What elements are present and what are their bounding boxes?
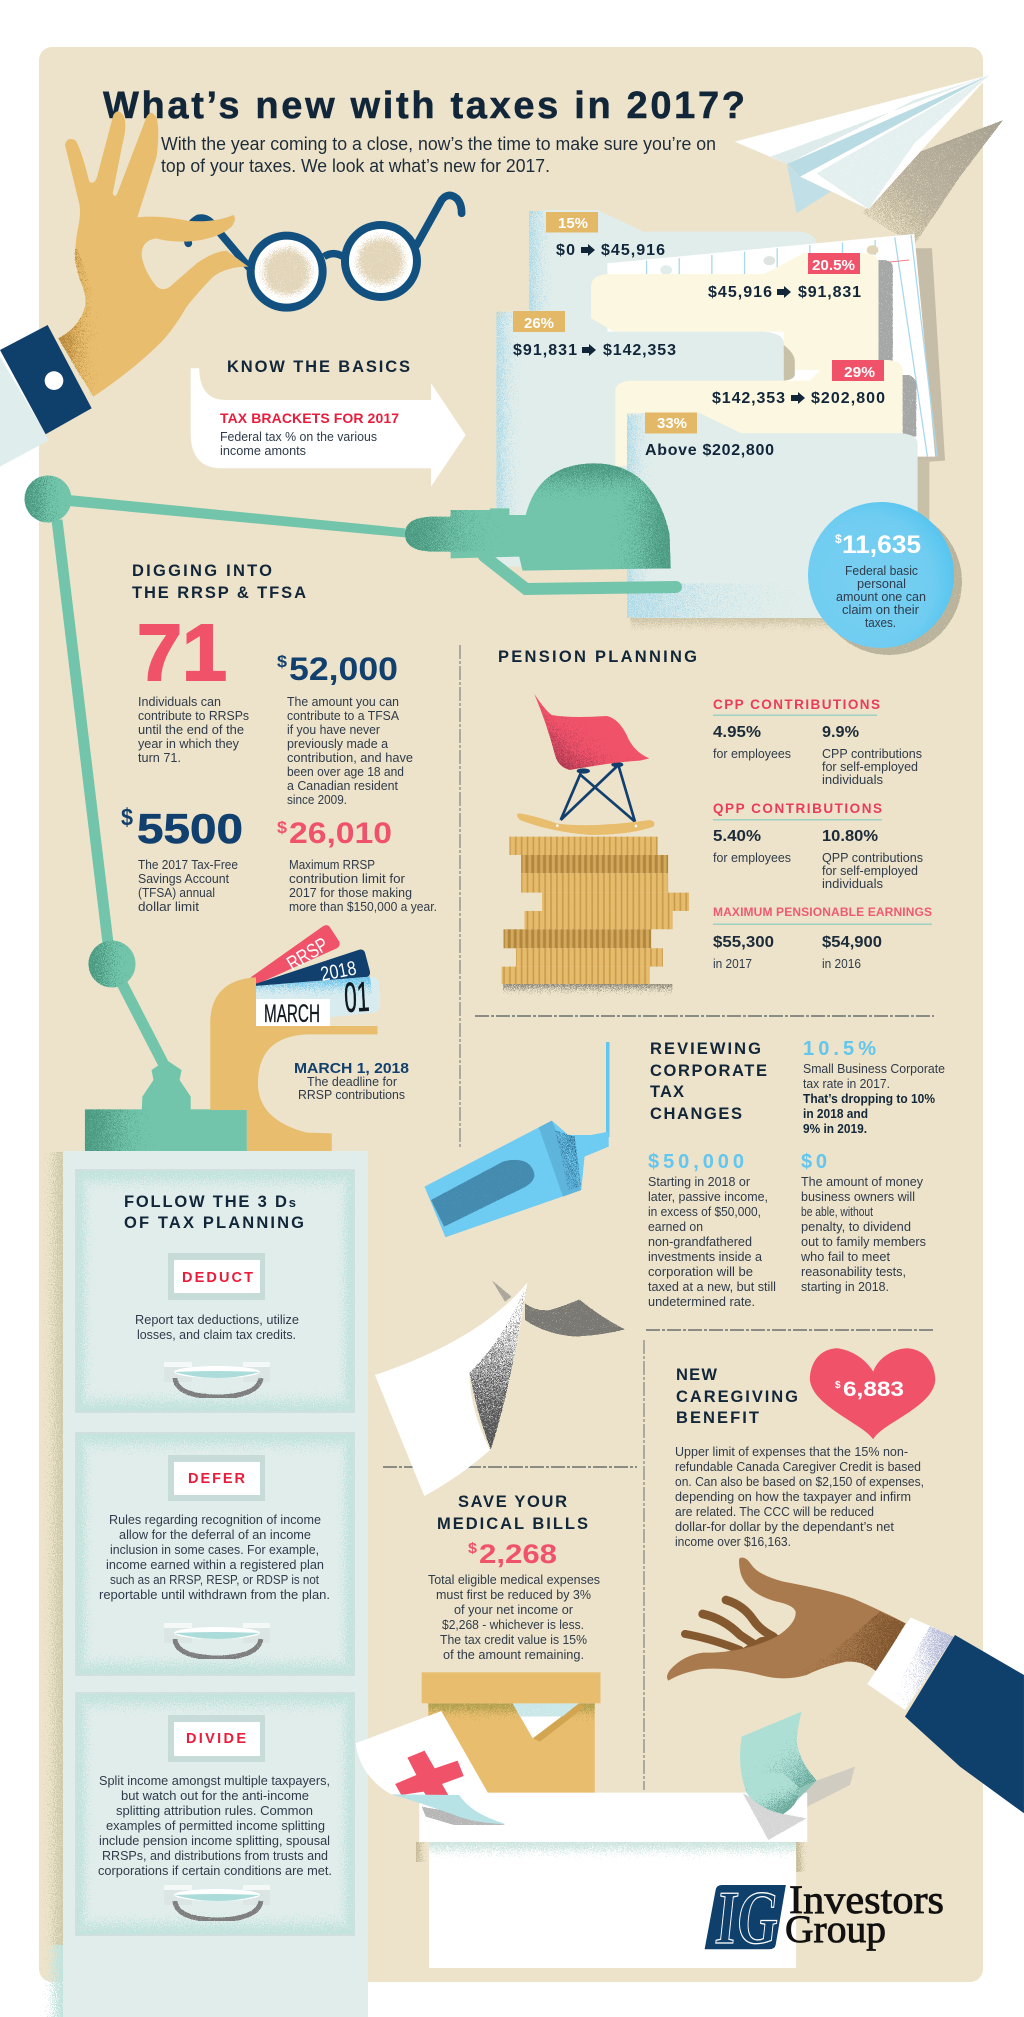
CPP contributions: for employees — [713, 746, 791, 761]
text: divide: but watch out for the anti-income — [121, 1788, 309, 1803]
blue circle: basic personal amount: amount one can — [836, 589, 926, 604]
stat: 10.5%: tax rate in 2017. — [803, 1076, 890, 1091]
stat: $26,010: 26,010 — [289, 817, 392, 850]
text: caregiving benefit: depending on how the taxpayer and infirm — [675, 1489, 911, 1504]
arrow: tax brackets: income amonts — [220, 443, 306, 458]
heading: save your medical bills — [437, 1493, 588, 1533]
palm — [667, 1557, 906, 1681]
stat: $0: who fail to meet — [800, 1249, 890, 1264]
stat: $2,268: 2,268 — [479, 1539, 557, 1569]
intro text — [161, 134, 716, 176]
stat: $5500: 5500 — [137, 805, 243, 852]
QPP contributions: for employees — [713, 850, 791, 865]
intro text: top of your taxes. We look at what’s new for 2017. — [161, 156, 550, 176]
folder tab 26% — [496, 311, 784, 567]
front folder — [627, 413, 918, 618]
intro text: With the year coming to a close, now’s the time to make sure you’re on — [161, 134, 716, 154]
text: caregiving benefit: refundable Canada Caregiver Credit is based — [675, 1459, 921, 1474]
heading: new caregiving benefit: CAREGIVING — [676, 1388, 798, 1406]
stat: 71: turn 71. — [138, 750, 181, 765]
QPP contributions: 5.40% — [713, 828, 761, 845]
stat: $5500: (TFSA) annual — [138, 885, 215, 900]
stat: $5500: Savings Account — [138, 871, 229, 886]
deadline text: The deadline for — [307, 1074, 398, 1089]
maximum pensionable earnings: $54,900 — [822, 934, 882, 951]
QPP contributions: 10.80% — [822, 828, 878, 845]
text: defer — [99, 1512, 330, 1602]
heading: digging into the RRSP & TFSA: THE RRSP & TFSA — [132, 584, 306, 602]
2018 card — [255, 950, 370, 987]
2018 card: 2018 — [319, 957, 358, 986]
text: defer: income earned within a registered plan — [106, 1557, 324, 1572]
cuff — [0, 325, 92, 434]
tax bracket ranges: $142,353 — [603, 342, 676, 359]
lamp head — [405, 463, 671, 571]
stat: $0: out to family members — [801, 1234, 926, 1249]
icon: green paper — [740, 1712, 855, 1840]
QPP contributions — [713, 801, 923, 891]
icon: highlighter — [425, 1042, 610, 1237]
RRSP card: RRSP — [283, 934, 332, 975]
dividers — [383, 645, 934, 1790]
tab 15%: 15% — [558, 216, 588, 232]
text: defer: such as an RRSP, RESP, or RDSP is not — [110, 1572, 319, 1587]
maximum pensionable earnings: in 2016 — [822, 956, 861, 971]
icon: green paper flap on box — [743, 1773, 817, 1840]
icon: rocking chair on coins — [502, 694, 689, 997]
stat: 71 — [137, 608, 249, 765]
navy sleeve — [905, 1635, 1024, 1813]
stat: $26,010: Maximum RRSP — [289, 857, 375, 872]
tax bracket ranges: $45,916 — [601, 242, 665, 259]
icon: desk lamp — [24, 463, 676, 1152]
icon: heart with $6,883 — [810, 1348, 935, 1439]
heading: reviewing corporate tax changes: CORPORATE — [650, 1062, 767, 1080]
stand — [210, 977, 377, 1152]
label: deduct: DEDUCT — [182, 1270, 253, 1286]
stat: $50,000: undetermined rate. — [648, 1294, 755, 1309]
lamp lower arm — [57, 520, 163, 1063]
stat: $52,000: contribute to a TFSA — [287, 708, 399, 723]
stat: $52,000: The amount you can — [287, 694, 399, 709]
stat: 10.5%: in 2018 and — [803, 1106, 868, 1121]
stat: $50,000: non-grandfathered — [648, 1234, 752, 1249]
stat: $2,268: $ — [468, 1540, 478, 1557]
stat: $0: starting in 2018. — [801, 1279, 889, 1294]
logo wordmark: Investors — [789, 1877, 944, 1922]
tab 20.5%: 20.5% — [812, 258, 855, 274]
logo wordmark: Group — [785, 1908, 886, 1951]
stat: $0: reasonability tests, — [801, 1264, 906, 1279]
lined paper — [607, 234, 935, 457]
deadline text — [294, 1061, 409, 1102]
blue circle: basic personal amount: $ — [835, 532, 842, 546]
fingers — [685, 1600, 773, 1650]
cuff button — [45, 371, 63, 390]
text: divide: include pension income splitting, spousal — [99, 1833, 330, 1848]
stat: $50,000: earned on — [648, 1219, 703, 1234]
text: caregiving benefit — [675, 1444, 924, 1549]
text: defer: reportable until withdrawn from the plan. — [99, 1587, 330, 1602]
stat: $50,000: Starting in 2018 or — [648, 1174, 751, 1189]
chair rocker — [517, 813, 654, 835]
stat: 71: Individuals can — [138, 694, 221, 709]
text: divide: RRSPs, and distributions from trusts and — [102, 1848, 328, 1863]
text: divide: corporations if certain conditions are met. — [98, 1863, 332, 1878]
drawer: divide — [76, 1693, 354, 1935]
text: defer: allow for the deferral of an income — [119, 1527, 311, 1542]
chair legs — [561, 765, 635, 822]
stat: 71: 71 — [137, 608, 227, 697]
heading: pension planning: PENSION PLANNING — [498, 648, 697, 666]
stat: 71: until the end of the — [138, 722, 244, 737]
text: defer: inclusion in some cases. For example, — [110, 1542, 319, 1557]
stat: 10.5%: 10.5% — [803, 1038, 876, 1060]
stat: 10.5%: Small Business Corporate — [803, 1061, 945, 1076]
icon: white box — [416, 1793, 809, 1968]
stat: $0: business owners will — [801, 1189, 915, 1204]
heading: follow the 3 Ds: OF TAX PLANNING — [124, 1214, 304, 1232]
stat: $26,010: contribution limit for — [289, 871, 406, 886]
stat: $50,000: $50,000 — [648, 1151, 744, 1173]
title: What’s new with taxes in 2017? — [103, 85, 745, 127]
stat: $0: penalty, to dividend — [801, 1219, 911, 1234]
tax bracket ranges: Above $202,800 — [645, 442, 774, 459]
lamp joints — [24, 476, 72, 522]
QPP contributions: for self-employed — [822, 863, 918, 878]
heading: save your medical bills: SAVE YOUR — [458, 1493, 567, 1511]
label: defer: DEFER — [188, 1471, 246, 1487]
stat: $0: be able, without — [801, 1204, 873, 1219]
tab 26% — [513, 311, 565, 332]
lamp base — [85, 1060, 247, 1152]
stat: $5500: dollar limit — [138, 899, 199, 914]
heading: reviewing corporate tax changes: CHANGES — [650, 1105, 742, 1123]
logo wordmark — [785, 1877, 944, 1951]
MARCH card — [256, 999, 330, 1028]
text: caregiving benefit: dollar-for dollar by the dependant’s net — [675, 1519, 894, 1534]
lamp upper arm — [69, 495, 405, 537]
tab 15% — [546, 212, 598, 232]
heading: digging into the RRSP & TFSA: DIGGING INTO — [132, 562, 272, 580]
MARCH card: MARCH — [264, 1000, 320, 1028]
icon: reaching hand — [667, 1557, 1024, 1813]
folder tab 29% — [615, 360, 903, 467]
text: deduct: losses, and claim tax credits. — [137, 1327, 296, 1342]
QPP contributions: individuals — [822, 876, 884, 891]
text: medical bills: must first be reduced by 3% — [436, 1587, 591, 1602]
blue circle: basic personal amount: claim on their — [842, 602, 920, 617]
blue circle: basic personal amount: personal — [857, 576, 906, 591]
cabinet shadow — [39, 1152, 63, 1970]
stat: $52,000: a Canadian resident — [287, 778, 398, 793]
label: deduct — [168, 1253, 265, 1300]
RRSP card — [251, 925, 340, 985]
text: medical bills — [428, 1572, 600, 1662]
label: divide — [168, 1715, 265, 1762]
icon: paper with red cross — [356, 1711, 508, 1825]
stat: $50,000: corporation will be — [648, 1264, 753, 1279]
CPP contributions: individuals — [822, 772, 884, 787]
stat: $52,000: been over age 18 and — [287, 764, 404, 779]
coin stack — [502, 837, 689, 997]
stat: $52,000 — [277, 651, 413, 807]
text: deduct: Report tax deductions, utilize — [135, 1312, 299, 1327]
text: caregiving benefit: income over $16,163. — [675, 1534, 791, 1549]
folder tab 20.5% — [591, 253, 878, 370]
tax bracket ranges: $0 — [556, 242, 575, 259]
stat: $26,010: 2017 for those making — [289, 885, 412, 900]
text: medical bills: Total eligible medical expenses — [428, 1572, 600, 1587]
icon: drawer handle — [164, 1623, 270, 1658]
heading: reviewing corporate tax changes — [650, 1040, 767, 1123]
stat: $5500: $ — [121, 804, 134, 831]
tax bracket ranges: $91,831 — [513, 342, 577, 359]
text: caregiving benefit: Upper limit of expenses that the 15% non- — [675, 1444, 908, 1459]
maximum pensionable earnings: in 2017 — [713, 956, 752, 971]
maximum pensionable earnings — [713, 905, 932, 971]
01 card: 01 — [343, 973, 370, 1021]
drawer: intro and deduct — [76, 1170, 354, 1412]
text: divide: Split income amongst multiple taxpayers, — [99, 1773, 330, 1788]
text: divide — [98, 1773, 332, 1878]
lamp handle — [484, 556, 676, 589]
arrow: tax brackets: TAX BRACKETS FOR 2017 — [220, 410, 399, 426]
QPP contributions: QPP contributions — [822, 850, 923, 865]
stat: $0 — [800, 1151, 926, 1294]
tab 29%: 29% — [844, 365, 875, 381]
heading: follow the 3 Ds — [124, 1193, 304, 1232]
icon: drawer handle — [164, 1885, 270, 1920]
tax bracket ranges: $202,800 — [811, 390, 885, 407]
stat: 10.5%: That’s dropping to 10% — [803, 1091, 935, 1106]
stat: $50,000: in excess of $50,000, — [648, 1204, 761, 1219]
arrow: tax brackets — [191, 368, 466, 487]
tab 33% — [645, 412, 697, 434]
shirt sleeve — [0, 357, 48, 467]
logo: Investors Group — [705, 1876, 944, 1960]
maximum pensionable earnings: $55,300 — [713, 934, 774, 951]
text: medical bills: $2,268 - whichever is less. — [442, 1617, 584, 1632]
stat: 71: contribute to RRSPs — [138, 708, 249, 723]
deadline text: RRSP contributions — [298, 1087, 405, 1102]
heading: follow the 3 Ds: FOLLOW THE 3 Ds — [124, 1193, 296, 1211]
text: defer: Rules regarding recognition of income — [109, 1512, 321, 1527]
CPP contributions: 9.9% — [822, 724, 859, 741]
tab 20.5% — [808, 253, 860, 274]
heading: digging into the RRSP & TFSA — [132, 562, 306, 602]
heading: reviewing corporate tax changes: REVIEWING — [650, 1040, 761, 1058]
stat: $26,010: $ — [277, 818, 288, 837]
stat: $26,010: more than $150,000 a year. — [289, 899, 437, 914]
stat: 10.5%: 9% in 2019. — [803, 1121, 867, 1136]
text: divide: splitting attribution rules. Common — [116, 1803, 313, 1818]
stat: $50,000 — [648, 1151, 776, 1309]
cabinet body — [63, 1151, 368, 2017]
stat: $52,000: if you have never — [287, 722, 381, 737]
text: caregiving benefit: are related. The CCC will be reduced — [675, 1504, 874, 1519]
maximum pensionable earnings: MAXIMUM PENSIONABLE EARNINGS — [713, 905, 932, 919]
heading: know the basics: KNOW THE BASICS — [227, 358, 410, 376]
logo mark: IG — [712, 1876, 783, 1960]
icon: drawer handle — [164, 1362, 270, 1397]
CPP contributions — [713, 697, 922, 787]
text: medical bills: of your net income or — [454, 1602, 574, 1617]
icon: hand holding glasses — [0, 111, 248, 467]
QPP contributions: QPP CONTRIBUTIONS — [713, 801, 882, 816]
icon: curled paper — [375, 1280, 625, 1496]
stat: $0: $0 — [801, 1151, 827, 1173]
tax bracket ranges: $142,353 — [712, 390, 785, 407]
stat: 71: year in which they — [138, 736, 239, 751]
icon: glasses — [187, 195, 462, 308]
tab 26%: 26% — [524, 316, 554, 332]
icon: heart with $6,883: $ — [835, 1380, 841, 1391]
CPP contributions: 4.95% — [713, 724, 761, 741]
paper shadow — [914, 248, 945, 463]
icon: medical box — [422, 1672, 600, 1793]
drawer: defer — [76, 1433, 354, 1675]
stat: $50,000: investments inside a — [648, 1249, 763, 1264]
icon: paper plane — [735, 75, 1003, 245]
illustration: tax bracket folders — [496, 210, 945, 635]
stat: $5500 — [121, 804, 243, 914]
stat: $52,000: since 2009. — [287, 792, 347, 807]
folder tab 15% — [529, 210, 816, 337]
blue circle: basic personal amount: Federal basic — [845, 563, 918, 578]
tax bracket ranges: $45,916 — [708, 284, 772, 301]
stat: $52,000: $ — [277, 652, 288, 671]
heading: reviewing corporate tax changes: TAX — [650, 1083, 684, 1101]
tab 33%: 33% — [657, 416, 687, 432]
percent tabs — [513, 212, 884, 434]
blue circle: basic personal amount: 11,635 — [842, 531, 921, 559]
tax bracket ranges — [513, 242, 885, 459]
stat: $0: The amount of money — [801, 1174, 923, 1189]
tax bracket ranges: $91,831 — [798, 284, 861, 301]
heading: save your medical bills: MEDICAL BILLS — [437, 1515, 588, 1533]
stat: $50,000: taxed at a new, but still — [648, 1279, 776, 1294]
heading: new caregiving benefit: NEW — [676, 1366, 717, 1384]
stat: $52,000: previously made a — [287, 736, 389, 751]
text: divide: examples of permitted income splitting — [106, 1818, 325, 1833]
CPP contributions: CPP contributions — [822, 746, 922, 761]
CPP contributions: for self-employed — [822, 759, 918, 774]
white cuff — [867, 1617, 954, 1710]
stat: $50,000: later, passive income, — [648, 1189, 768, 1204]
heading: new caregiving benefit — [676, 1366, 798, 1427]
text: medical bills: of the amount remaining. — [443, 1647, 584, 1662]
stat: 10.5% — [803, 1038, 945, 1136]
arrow: tax brackets: Federal tax % on the various — [220, 429, 377, 444]
stat: $5500: The 2017 Tax-Free — [138, 857, 238, 872]
blue circle: basic personal amount: taxes. — [865, 615, 896, 630]
icon: heart with $6,883: 6,883 — [843, 1378, 904, 1401]
icon: date holder with cards — [210, 925, 380, 1152]
tab 29% — [832, 360, 884, 381]
text: caregiving benefit: on. Can also be based on $2,150 of expenses, — [675, 1474, 924, 1489]
text: deduct — [135, 1312, 299, 1342]
text: medical bills: The tax credit value is 15% — [440, 1632, 587, 1647]
chair seat — [534, 694, 649, 770]
CPP contributions: CPP CONTRIBUTIONS — [713, 697, 880, 712]
deadline text: MARCH 1, 2018 — [294, 1061, 409, 1077]
label: divide: DIVIDE — [186, 1731, 246, 1747]
stat: $52,000: contribution, and have — [287, 750, 413, 765]
heading: new caregiving benefit: BENEFIT — [676, 1409, 759, 1427]
label: defer — [168, 1455, 265, 1501]
stat: $52,000: 52,000 — [289, 651, 398, 687]
stat: $26,010 — [277, 817, 437, 914]
blue circle: basic personal amount — [808, 502, 962, 655]
file cabinet — [39, 1151, 368, 2017]
01 card — [255, 973, 380, 1021]
